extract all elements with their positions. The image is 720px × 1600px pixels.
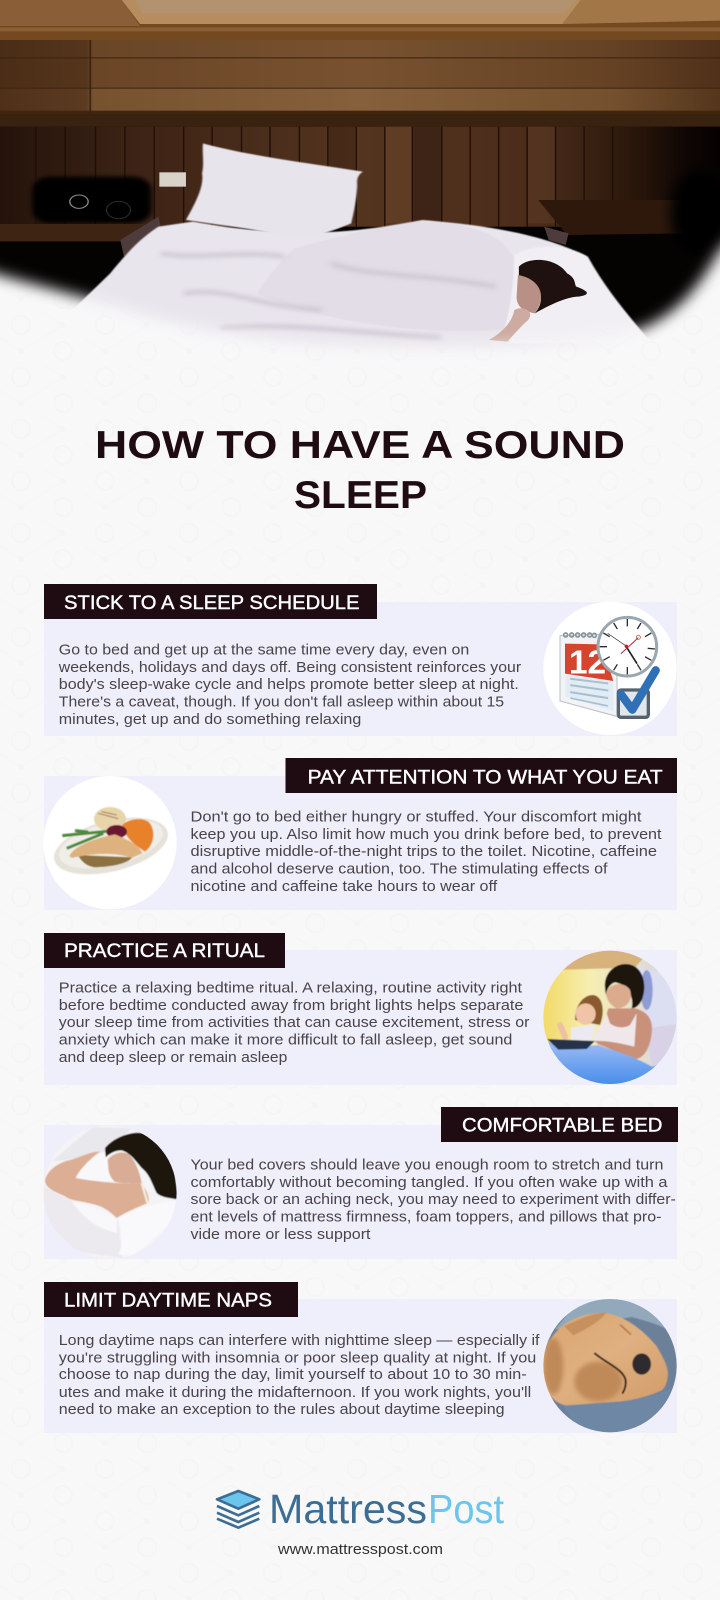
body text: and deep sleep or remain asleep (59, 1050, 287, 1066)
body text: There's a caveat, though. If you don't fall asleep within about 15 (59, 694, 504, 710)
hero photo: woman asleep in a wooden bedroom (0, 0, 720, 348)
body text: comfortably without becoming tangled. If you often wake up with a (190, 1175, 668, 1191)
body text: Don't go to bed either hungry or stuffed. Your discomfort might (190, 810, 642, 826)
panel background (44, 776, 677, 910)
dark beam (0, 115, 720, 127)
body text: and alcohol deserve caution, too. The stimulating effects of (190, 862, 609, 878)
body text: vide more or less support (190, 1227, 370, 1243)
sleeping woman's head (489, 260, 587, 342)
icon: plate of food (43, 776, 177, 909)
icon: calendar, clock and check mark: 12 (569, 645, 606, 682)
body text: choose to nap during the day, limit yourself to about 10 to 30 min- (59, 1367, 527, 1383)
body text: utes and make it during the midafternoon. If you work nights, you'll (59, 1385, 531, 1401)
photo: woman sleeping on white pillow (44, 1127, 177, 1258)
banner heading (44, 1282, 298, 1317)
body text: weekends, holidays and days off. Being consistent reinforces your (58, 660, 521, 676)
title: SLEEP (294, 474, 427, 517)
ceiling and skylight (0, 0, 720, 40)
body text: ent levels of mattress firmness, foam toppers, and pillows that pro- (190, 1210, 662, 1226)
photo: sleeping puppy (543, 1299, 677, 1432)
body text: you're struggling with insomnia or poor sleep quality at night. If you (59, 1351, 536, 1367)
panel: comfortable bed (38, 1107, 678, 1263)
bed frame edges (120, 217, 568, 257)
wordmark: Mattress (269, 1486, 427, 1532)
body text (190, 810, 662, 895)
body text: nicotine and caffeine take hours to wear off (190, 879, 498, 895)
banner heading (44, 584, 377, 619)
horizontal wood planks (0, 40, 720, 115)
bedside shelves (0, 170, 720, 257)
body text: before bedtime conducted away from bright lights helps separate (59, 998, 523, 1014)
body text: disruptive middle-of-the-night trips to the toilet. Nicotine, caffeine (190, 844, 657, 860)
body text: minutes, get up and do something relaxing (59, 712, 361, 728)
banner heading: LIMIT DAYTIME NAPS (64, 1290, 272, 1312)
body text: your sleep time from activities that can cause excitement, stress or (59, 1015, 530, 1031)
panel background (44, 602, 677, 736)
duvet (69, 220, 652, 367)
body text: Long daytime naps can interfere with nighttime sleep — especially if (59, 1333, 541, 1349)
bedside stereo and switch (32, 172, 186, 223)
body text (58, 642, 521, 728)
body text: anxiety which can make it more difficult to fall asleep, get sound (59, 1033, 512, 1049)
panel background (44, 1299, 677, 1433)
banner heading: PRACTICE A RITUAL (64, 940, 265, 962)
body text: sore back or an aching neck, you may need to experiment with differ- (190, 1192, 676, 1208)
banner heading (286, 758, 677, 793)
panel: limit daytime naps (44, 1282, 682, 1440)
wordmark: Post (428, 1486, 505, 1532)
photo: mother reading to child in bed (543, 950, 676, 1084)
panel: practice a ritual (44, 933, 685, 1092)
icon: calendar, clock and check mark (543, 602, 677, 735)
body text: Your bed covers should leave you enough room to stretch and turn (190, 1158, 663, 1174)
banner heading (44, 933, 285, 968)
vertical wall panels (0, 127, 720, 227)
body text: Practice a relaxing bedtime ritual. A relaxing, routine activity right (59, 981, 522, 997)
banner heading: PAY ATTENTION TO WHAT YOU EAT (308, 766, 663, 788)
title (95, 424, 625, 517)
website url: www.mattresspost.com (277, 1541, 443, 1558)
banner heading (441, 1107, 678, 1142)
panel: pay attention to what you eat (43, 758, 677, 910)
body text (59, 981, 530, 1066)
body text: need to make an exception to the rules about daytime sleeping (59, 1402, 505, 1418)
banner heading: STICK TO A SLEEP SCHEDULE (64, 592, 360, 614)
pillow (186, 143, 363, 239)
body text (59, 1333, 541, 1418)
body text: keep you up. Also limit how much you drink before bed, to prevent (190, 827, 662, 843)
panel background (44, 950, 677, 1085)
logo: MattressPost (217, 1486, 505, 1558)
body text: body's sleep-wake cycle and helps promote better sleep at night. (59, 677, 519, 693)
banner heading: COMFORTABLE BED (462, 1115, 662, 1137)
wordmark (269, 1486, 505, 1532)
panel: stick to a sleep schedule (44, 584, 677, 736)
body text (190, 1158, 676, 1243)
body text: Go to bed and get up at the same time every day, even on (59, 642, 469, 658)
panel background (44, 1125, 677, 1259)
icon: stacked mattress layers (217, 1491, 259, 1528)
title: HOW TO HAVE A SOUND (95, 424, 625, 467)
